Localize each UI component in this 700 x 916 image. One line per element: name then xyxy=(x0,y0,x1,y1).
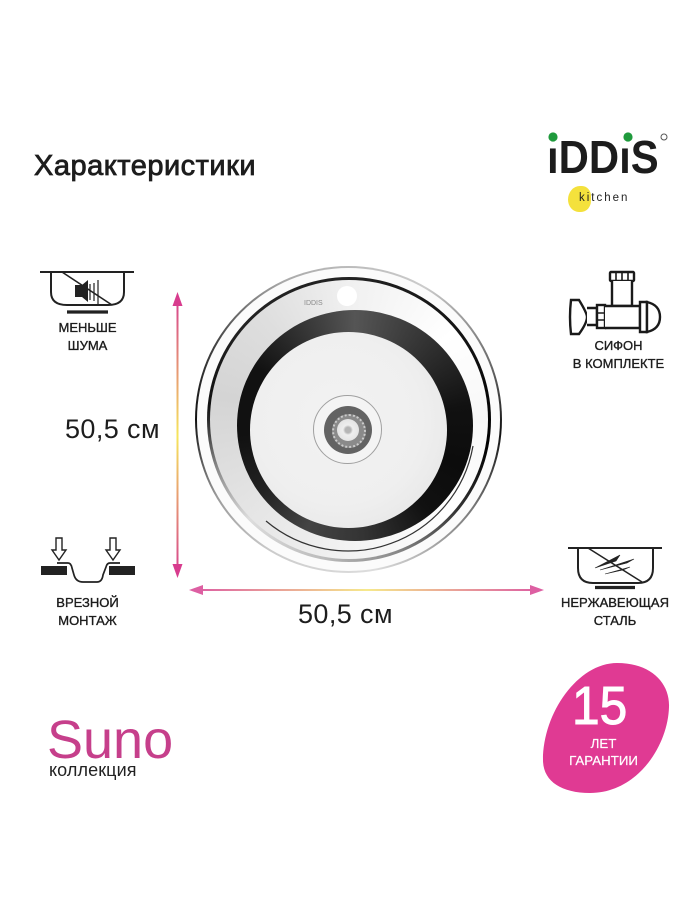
bowl floor xyxy=(250,332,447,528)
bowl wall xyxy=(237,310,473,541)
feature: flush mount xyxy=(41,537,135,628)
label xyxy=(573,338,664,371)
logo yellow blob xyxy=(568,186,591,212)
horizontal dimension arrow xyxy=(189,585,544,595)
drain strainer xyxy=(332,414,366,448)
drain flange xyxy=(313,395,382,464)
icon: muted speaker in bowl xyxy=(40,271,134,314)
badge caption xyxy=(569,736,638,768)
logo sub text: kitchen xyxy=(579,192,629,204)
label xyxy=(56,595,119,628)
tap hole xyxy=(337,286,357,306)
sink rim inner band xyxy=(197,268,500,571)
collection name: Suno xyxy=(47,710,173,770)
badge shape xyxy=(542,663,670,793)
label: ВРЕЗНОЙ xyxy=(56,595,119,610)
feature: stainless steel xyxy=(561,547,669,628)
feature: siphon included xyxy=(568,270,664,371)
label xyxy=(58,320,116,353)
sink flange xyxy=(210,280,488,559)
bowl outer highlight arc xyxy=(266,446,474,552)
badge caption: ЛЕТ xyxy=(591,736,616,751)
drain dark ring xyxy=(324,406,372,454)
logo wordmark: ıDDıS xyxy=(547,131,659,183)
engraved brand: IDDIS xyxy=(304,300,323,307)
drain cap xyxy=(337,419,359,441)
icon: siphon xyxy=(568,270,662,336)
sink rim xyxy=(195,266,502,573)
vertical dimension arrow xyxy=(172,292,182,578)
badge caption: ГАРАНТИИ xyxy=(569,753,638,768)
collection caption: коллекция xyxy=(49,760,137,780)
feature: less noise xyxy=(40,271,134,353)
label: СИФОН xyxy=(594,338,643,353)
label: СТАЛЬ xyxy=(594,613,636,628)
icon: mounting diagram xyxy=(41,537,135,583)
icon: scratched bowl xyxy=(568,547,662,590)
label: НЕРЖАВЕЮЩАЯ xyxy=(561,595,669,610)
warranty badge xyxy=(542,663,670,793)
title: Характеристики xyxy=(34,150,256,182)
label: МЕНЬШЕ xyxy=(58,320,116,335)
label: В КОМПЛЕКТЕ xyxy=(573,356,664,371)
logo green dots xyxy=(548,132,668,142)
vertical dimension label: 50,5 см xyxy=(65,414,160,444)
badge number: 15 xyxy=(572,676,627,736)
label xyxy=(561,595,669,628)
sink xyxy=(195,266,502,573)
horizontal dimension label: 50,5 см xyxy=(298,599,393,629)
label: ШУМА xyxy=(68,338,107,353)
label: МОНТАЖ xyxy=(58,613,117,628)
sink flange groove xyxy=(207,277,491,562)
brand logo xyxy=(547,131,668,212)
drain xyxy=(313,395,382,464)
